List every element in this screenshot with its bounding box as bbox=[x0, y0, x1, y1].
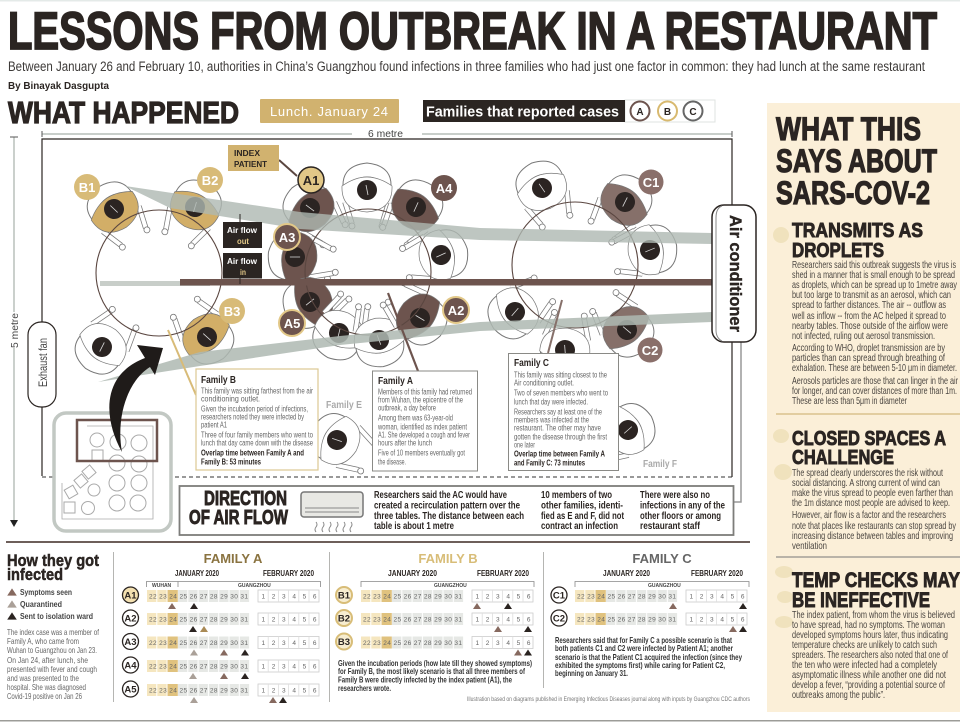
panel: family B note: patient A1 bbox=[201, 420, 227, 430]
panel: family A note: Members of this family had returned bbox=[378, 388, 472, 396]
air conditioner: Air conditioner bbox=[726, 215, 745, 332]
text: other floors: infections in any of the bbox=[640, 500, 725, 512]
text: other families: fied as E and F, did not bbox=[541, 510, 624, 522]
panel: family A timeline: WUHAN bbox=[152, 583, 172, 589]
text: other floors: restaurant staff bbox=[640, 520, 700, 532]
row A3: A3 bbox=[124, 637, 137, 648]
label: family F: Family F bbox=[643, 459, 677, 470]
row C1: 1 2 3 4 5 6 bbox=[690, 593, 745, 600]
panel: family B timeline: FAMILY B bbox=[418, 551, 478, 566]
row A3: 22 23 24 25 26 27 28 29 30 31 bbox=[149, 640, 248, 647]
body text: Covid-19 positive on Jan 26 bbox=[7, 691, 82, 701]
height ruler: 5 metre bbox=[9, 313, 21, 348]
note: family B: Given the incubation periods (how late till they showed symptoms) bbox=[338, 658, 532, 668]
section: temp checks may be ineffective: outbreaks among the public”. bbox=[792, 689, 885, 701]
text: recirculation: three tables. The distance between each bbox=[374, 510, 524, 522]
heading: direction of air flow bbox=[189, 488, 288, 529]
date badge bbox=[260, 99, 399, 123]
family legend: Families that reported cases bbox=[426, 104, 619, 120]
airflow: middle stream bbox=[100, 279, 712, 286]
row A1 bbox=[122, 587, 319, 609]
row A2 bbox=[122, 610, 319, 632]
body text: On Jan 24, after lunch, she bbox=[7, 655, 88, 665]
row A4: 1 2 3 4 5 6 bbox=[262, 663, 317, 670]
panel: family B timeline: JANUARY 2020 bbox=[388, 569, 437, 578]
panel: family C note: restaurant. The other may have bbox=[514, 424, 601, 432]
locator map bbox=[54, 413, 171, 531]
callout: index patient: PATIENT bbox=[234, 160, 267, 169]
text: other families bbox=[541, 489, 624, 532]
note: family B: Family B were directly infected by the index patient (A1), the bbox=[338, 674, 512, 684]
note: family B: researchers wrote. bbox=[338, 683, 391, 693]
row A5: 22 23 24 25 26 27 28 29 30 31 bbox=[149, 687, 248, 694]
callout: air flow in bbox=[223, 253, 262, 284]
panel: what this says about sars-cov-2 bbox=[767, 103, 960, 712]
text: recirculation: Researchers said the AC would have bbox=[374, 489, 507, 501]
panel: family A note: woman, identified as index patient bbox=[377, 422, 468, 432]
panel: family A note: Five of 10 members eventually got bbox=[378, 448, 466, 458]
body text: hospital. She was diagnosed bbox=[7, 682, 86, 692]
seat labels: B3 bbox=[224, 304, 240, 319]
section: temp checks may be ineffective: BE INEFFECTIVE bbox=[792, 589, 930, 612]
note: family B: for Family B, the most likely scenario is that all three members of bbox=[338, 666, 525, 676]
text: other floors: other floors or among bbox=[640, 510, 721, 522]
row B2: 22 23 24 25 26 27 28 29 30 31 bbox=[363, 616, 462, 623]
table A bbox=[305, 209, 431, 335]
seat labels bbox=[74, 167, 664, 362]
body text: Wuhan to Guangzhou on Jan 23. bbox=[7, 645, 97, 655]
heading: direction of air flow: OF AIR FLOW bbox=[189, 507, 288, 529]
family legend: C bbox=[689, 107, 697, 118]
panel: family C note bbox=[508, 300, 618, 470]
text: recirculation: table is about 1 metre bbox=[374, 520, 454, 532]
panel: family C note: Air conditioning outlet. bbox=[514, 378, 574, 388]
row B1 bbox=[336, 587, 533, 609]
height ruler bbox=[9, 137, 21, 527]
panel: family A note: Family A bbox=[378, 376, 413, 387]
text: other floors: There were also no bbox=[640, 489, 710, 501]
panel: family C note: Researchers say at least one of the bbox=[514, 408, 602, 416]
row A3 bbox=[122, 634, 319, 656]
row A1: A1 bbox=[124, 590, 137, 602]
panel: family B note: Given the incubation period of infections, bbox=[201, 404, 308, 414]
icon: air conditioner unit bbox=[301, 492, 363, 532]
note: family B bbox=[338, 658, 532, 693]
row C2: C2 bbox=[553, 614, 565, 624]
panel: family B timeline: GUANGZHOU bbox=[434, 583, 467, 589]
callout: air flow out: Air flow bbox=[227, 225, 257, 235]
seat labels: A5 bbox=[284, 316, 300, 331]
section: temp checks may be ineffective bbox=[792, 569, 960, 701]
text: other floors bbox=[640, 489, 725, 532]
seat labels: B2 bbox=[202, 173, 218, 188]
panel: family B note: Overlap time between Family A and bbox=[201, 448, 304, 458]
row C1: C1 bbox=[553, 590, 566, 602]
panel: family C note: lunch that day were infected. bbox=[514, 398, 588, 406]
panel: family C timeline: FEBRUARY 2020 bbox=[691, 569, 743, 578]
callout: index patient: INDEX bbox=[234, 149, 261, 158]
text: other families: other families, identi- bbox=[541, 500, 623, 512]
row A5: 1 2 3 4 5 6 bbox=[262, 687, 317, 694]
note: family C: scenario is that the Patient C1 acquired the infection (since they bbox=[555, 652, 742, 662]
seat labels: B1 bbox=[79, 180, 95, 195]
byline: By Binayak Dasgupta bbox=[8, 80, 109, 92]
panel: family C note: Overlap time between Family A bbox=[514, 450, 605, 458]
heading bbox=[7, 551, 99, 584]
panel: family C timeline: FAMILY C bbox=[632, 551, 692, 566]
panel: how they got infected bbox=[7, 551, 99, 701]
heading: direction of air flow: DIRECTION bbox=[204, 488, 287, 510]
row C1 bbox=[551, 587, 747, 609]
panel: family A note: hours after the lunch bbox=[378, 438, 432, 448]
row A2: 22 23 24 25 26 27 28 29 30 31 bbox=[149, 616, 248, 623]
callout: air flow in: Air flow bbox=[227, 256, 257, 266]
body text: Family A, who came from bbox=[7, 636, 79, 646]
note: family C: Researchers said that for Family C a possible scenario is that bbox=[555, 635, 732, 645]
panel: family B note: researchers noted they were infected by bbox=[201, 412, 304, 422]
panel: family C note: Family C bbox=[514, 358, 549, 369]
row B3: 1 2 3 4 5 6 bbox=[476, 640, 531, 647]
panel: family B note bbox=[168, 330, 318, 470]
section: closed spaces a challenge bbox=[792, 428, 957, 552]
seat labels: C2 bbox=[642, 343, 658, 358]
row B2: 1 2 3 4 5 6 bbox=[476, 616, 531, 623]
legend: Sent to isolation ward bbox=[20, 611, 93, 621]
section: closed spaces a challenge: ventilation bbox=[792, 540, 827, 552]
row A4 bbox=[122, 657, 319, 679]
panel: family A note: Among them was 63-year-old bbox=[378, 414, 453, 422]
panel: family A note bbox=[372, 293, 478, 471]
decorative marks bbox=[773, 227, 793, 628]
row C2: 1 2 3 4 5 6 bbox=[690, 616, 745, 623]
panel: family C note: and Family C: 73 minutes bbox=[514, 458, 585, 468]
heading: WHAT THIS bbox=[776, 111, 921, 147]
row B2 bbox=[336, 610, 533, 632]
body text bbox=[7, 627, 99, 701]
panel: family B note: conditioning outlet. bbox=[201, 394, 260, 404]
row A4: A4 bbox=[124, 660, 137, 672]
panel: family B timeline bbox=[336, 551, 534, 693]
callout: air flow out bbox=[223, 214, 262, 248]
width ruler bbox=[42, 128, 732, 140]
seated diners bbox=[66, 153, 681, 481]
family legend: B bbox=[664, 107, 671, 118]
callout: index patient bbox=[228, 145, 297, 176]
note: family C: exhibited the symptoms first) while caring for Patient C2, bbox=[555, 660, 725, 670]
panel: family B note: Family B: 53 minutes bbox=[201, 458, 261, 466]
date badge: Lunch. January 24 bbox=[270, 104, 388, 119]
panel: family C note: This family was sitting closest to the bbox=[514, 370, 607, 380]
airflow: upper stream bbox=[125, 186, 712, 244]
panel: family C timeline bbox=[551, 551, 749, 678]
text: recirculation bbox=[374, 489, 524, 532]
note: family C bbox=[555, 635, 742, 678]
legend bbox=[7, 587, 93, 621]
legend: Symptoms seen bbox=[20, 587, 72, 597]
row C2 bbox=[551, 610, 747, 632]
row A2: A2 bbox=[124, 614, 137, 624]
panel: family A note: outbreak, a day before bbox=[378, 404, 436, 412]
heading: what happened: WHAT HAPPENED bbox=[8, 95, 239, 130]
row C1: 22 23 24 25 26 27 28 29 30 31 bbox=[577, 593, 676, 600]
air conditioner bbox=[712, 205, 756, 342]
section: transmits as droplets: TRANSMITS AS bbox=[792, 220, 923, 242]
note: family C: both patients C1 and C2 were infected by Patient A1; another bbox=[555, 643, 733, 653]
panel: family A timeline: FEBRUARY 2020 bbox=[263, 569, 314, 578]
heading: infected bbox=[7, 565, 63, 584]
panel: family C timeline: GUANGZHOU bbox=[648, 583, 681, 589]
table C bbox=[512, 202, 638, 328]
row A2: 1 2 3 4 5 6 bbox=[262, 616, 317, 623]
seat labels: C1 bbox=[643, 175, 659, 190]
panel: family A note: A1. She developed a cough and fever bbox=[378, 430, 470, 440]
heading: How they got bbox=[7, 551, 99, 570]
arrow: zoom from locator to floor plan bbox=[109, 345, 163, 452]
panel: family B note: lunch that day came down with the disease bbox=[201, 438, 313, 448]
width ruler: 6 metre bbox=[368, 128, 403, 140]
text: other families: 10 members of two bbox=[541, 489, 612, 501]
note: family C: beginning on January 31. bbox=[555, 668, 628, 678]
panel: family B note: Three of four family members who went to bbox=[201, 430, 313, 440]
heading bbox=[776, 111, 937, 211]
callout: air flow out: out bbox=[237, 236, 249, 246]
row A3: 1 2 3 4 5 6 bbox=[262, 640, 317, 647]
section: transmits as droplets bbox=[791, 220, 958, 407]
row B3: B3 bbox=[338, 637, 350, 648]
panel: family C note: Two of seven members who went to bbox=[514, 388, 608, 398]
body text: and was presented to the bbox=[7, 673, 79, 683]
section: closed spaces a challenge: CHALLENGE bbox=[792, 447, 894, 469]
text: other families: contract an infection bbox=[541, 520, 618, 532]
seat labels: A3 bbox=[279, 230, 295, 245]
panel: family B note: This family was sitting farthest from the air bbox=[201, 386, 313, 396]
row B1: 1 2 3 4 5 6 bbox=[476, 593, 531, 600]
exhaust fan bbox=[28, 322, 56, 407]
panel: family A note: from Wuhan, the epicentre of the bbox=[378, 396, 463, 404]
row B3: 22 23 24 25 26 27 28 29 30 31 bbox=[363, 640, 462, 647]
row B1: 22 23 24 25 26 27 28 29 30 31 bbox=[363, 593, 462, 600]
section: transmits as droplets: DROPLETS bbox=[792, 240, 884, 262]
panel: family C note: gotten the disease through the first bbox=[514, 432, 608, 442]
seat labels: A1 bbox=[303, 173, 319, 188]
row A1: 22 23 24 25 26 27 28 29 30 31 bbox=[149, 593, 248, 600]
seat labels: A4 bbox=[436, 181, 453, 196]
exhaust fan: Exhaust fan bbox=[36, 338, 50, 387]
panel: direction of air flow bbox=[180, 486, 734, 535]
panel: family C note: one later bbox=[514, 440, 535, 450]
row B3 bbox=[336, 634, 533, 656]
panel: restaurant floor plan bbox=[9, 128, 756, 531]
table B bbox=[96, 210, 222, 336]
family legend bbox=[423, 100, 715, 122]
panel: family A note: the disease. bbox=[378, 458, 406, 466]
panel: family A timeline: GUANGZHOU bbox=[238, 583, 271, 589]
section: transmits as droplets: These are less than 5μm in diameter bbox=[792, 395, 907, 407]
body text: presented with fever and cough bbox=[7, 664, 97, 674]
panel: family A timeline: FAMILY A bbox=[204, 551, 263, 566]
callout: air flow in: in bbox=[240, 267, 246, 277]
row A1: 1 2 3 4 5 6 bbox=[262, 593, 317, 600]
family legend: A bbox=[636, 107, 644, 118]
row B1: B1 bbox=[338, 590, 351, 602]
panel: family C timeline: JANUARY 2020 bbox=[603, 569, 650, 578]
panel: family C note: members was infected at the bbox=[514, 416, 589, 424]
legend: Quarantined bbox=[20, 599, 62, 609]
row C2: 22 23 24 25 26 27 28 29 30 31 bbox=[577, 616, 676, 623]
seat labels: A2 bbox=[448, 303, 464, 318]
credit: Illustration based on diagrams published in Emerging Infectious Diseases journal along with inputs by Guangzhou CDC authors bbox=[467, 697, 750, 703]
row B2: B2 bbox=[338, 614, 350, 624]
text: recirculation: created a recirculation pattern over the bbox=[374, 500, 520, 512]
row A4: 22 23 24 25 26 27 28 29 30 31 bbox=[149, 663, 248, 670]
row A5 bbox=[122, 681, 319, 703]
panel: family B timeline: FEBRUARY 2020 bbox=[477, 569, 529, 578]
label: family E: Family E bbox=[326, 400, 362, 411]
panel: family A timeline: JANUARY 2020 bbox=[175, 569, 219, 578]
airflow: lower stream bbox=[98, 312, 712, 382]
body text: The index case was a member of bbox=[7, 627, 99, 637]
row A5: A5 bbox=[124, 684, 137, 696]
panel: family B note: Family B bbox=[201, 375, 236, 386]
panel: family A timeline bbox=[122, 551, 320, 703]
